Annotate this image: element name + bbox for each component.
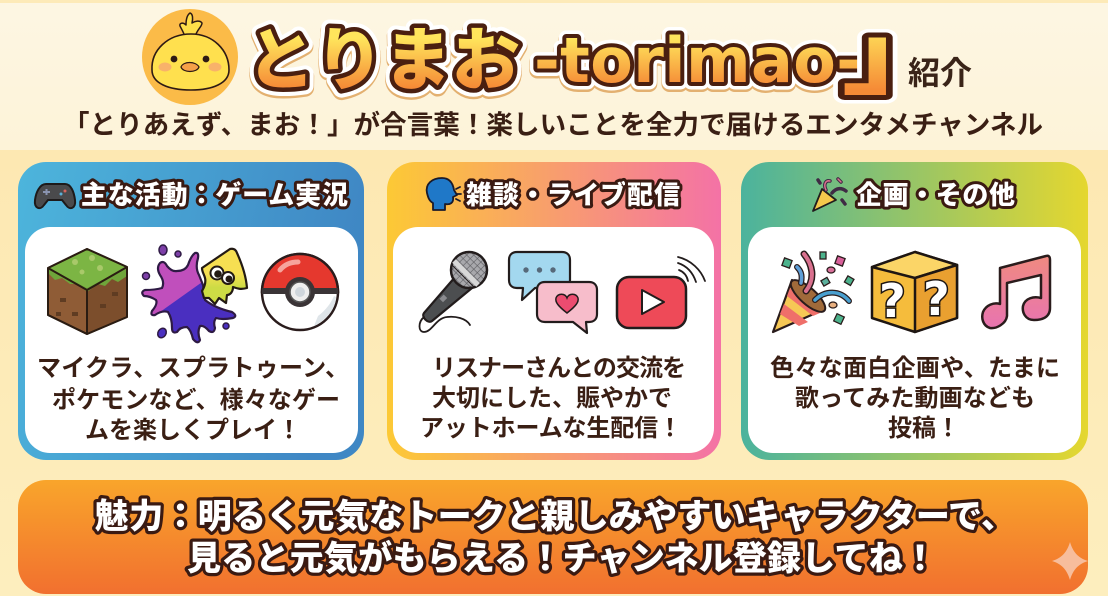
icon: question block: ? [879,274,906,328]
icon: grass block [48,249,127,334]
title [247,4,963,105]
description: live: アットホームな生配信！ [420,415,682,442]
call to action banner [18,480,1088,594]
heading: chat and live: 雑談・ライブ配信 [466,180,680,210]
title suffix: 紹介 [908,55,972,91]
icon: ink splat and squid [141,244,248,344]
title: とりまお [247,23,520,99]
icon: microphone [420,252,487,332]
icon: party popper [773,252,854,332]
description: projects: 歌ってみた動画なども [795,385,1035,412]
heading: main activity: 主な活動：ゲーム実況 [81,180,348,210]
icon: poke ball [262,254,338,330]
icon: small party popper [813,179,846,211]
icon: chick mascot [142,9,238,105]
icon: live video [617,257,705,328]
title: -torimao- [534,26,862,99]
heading: projects: 企画・その他 [856,180,1015,210]
description: games: ムを楽しくプレイ！ [85,417,301,444]
description: projects [770,355,1060,442]
subtitle: 「とりあえず、まお！」が合言葉！楽しいことを全力で届けるエンタメチャンネル [63,110,1043,140]
description: projects: 投稿！ [888,415,960,442]
description: games: マイクラ、スプラトゥーン、 [37,355,349,382]
icon: game controller [35,184,75,208]
icon: music note [982,256,1050,328]
description: live [420,355,686,442]
panel: projects and others [741,162,1088,460]
icon: speaking head [427,178,461,210]
description: games: ポケモンなど、様々なゲー [52,387,340,414]
description: games [37,355,349,444]
title: -torimao- [534,24,862,97]
header [63,4,1043,140]
title: 」 [842,4,963,105]
panel: game streaming [18,162,364,460]
icon: chat bubbles [509,252,597,333]
icon: sparkle [1052,542,1088,580]
banner text: 見ると元気がもらえる！チャンネル登録してね！ [187,539,937,578]
title: とりまお [247,25,520,101]
banner text: 魅力：明るく元気なトークと親しみやすいキャラクターで、 [95,498,1015,536]
title: とりまお [247,23,520,99]
title: 」 [842,4,963,105]
description: live: 大切にした、賑やかで [432,385,672,412]
description: live: リスナーさんとの交流を [432,355,686,382]
icon: question block [872,252,957,332]
panel: chat and live streaming [387,162,721,460]
banner text [95,498,1015,578]
title: -torimao- [534,24,862,97]
icon: question block: ? [923,272,950,326]
description: projects: 色々な面白企画や、たまに [770,355,1060,382]
